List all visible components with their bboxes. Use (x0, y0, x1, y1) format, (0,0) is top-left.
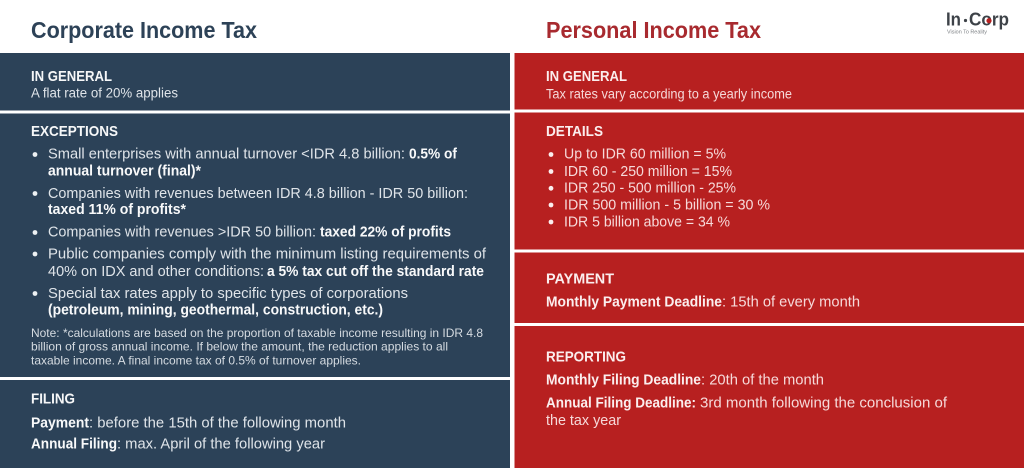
panel: exceptions (0, 114, 510, 377)
panel: payment: : 15th of every month (722, 294, 860, 311)
panel: in general (corporate): IN GENERAL (31, 68, 112, 85)
bullet list: exceptions: Small enterprises with annual turnover <IDR 4.8 billion: (48, 146, 405, 163)
bullet list: tax brackets: Up to IDR 60 million = 5% (564, 146, 726, 163)
panel: in general (personal) (514, 53, 1024, 110)
panel: payment: Monthly Payment Deadline (546, 294, 722, 311)
panel: details (514, 112, 1024, 250)
heading: details: DETAILS (546, 123, 603, 140)
note: calculations: Note: *calculations are based on the proportion of taxable income resulting in IDR 4.8 (31, 326, 483, 340)
panel: filing: : max. April of the following year (117, 436, 325, 453)
panel: reporting: : 20th of the month (701, 372, 824, 389)
logo: InCorp: In (946, 9, 961, 30)
panel: payment: PAYMENT (546, 270, 614, 287)
bullet list: exceptions: Special tax rates apply to specific types of corporations (48, 285, 408, 302)
panel: payment (514, 252, 1024, 323)
bullet list: tax brackets: IDR 5 billion above = 34 % (564, 213, 730, 230)
panel: in general (personal): Tax rates vary according to a yearly income (546, 86, 792, 101)
note: calculations: billion of gross annual income. If below the amount, the reduction applies to all (31, 340, 448, 354)
bullet list: tax brackets: IDR 60 - 250 million = 15% (564, 163, 732, 180)
panel: reporting: Annual Filing Deadline: (546, 394, 696, 411)
bullet list: exceptions: Companies with revenues between IDR 4.8 billion - IDR 50 billion: (48, 185, 468, 202)
panel: filing (0, 380, 510, 468)
panel: reporting: the tax year (546, 412, 621, 429)
logo: InCorp (946, 9, 1009, 36)
note: calculations (31, 326, 483, 368)
bullet list: exceptions: taxed 11% of profits* (48, 201, 186, 218)
panel: in general (personal): IN GENERAL (546, 68, 627, 85)
bullet list: tax brackets: IDR 250 - 500 million - 25% (564, 180, 736, 197)
panel: filing: Annual Filing (31, 436, 117, 453)
bullet list: exceptions: 40% on IDX and other conditions: (48, 263, 264, 280)
title: corporate income tax: Corporate Income Tax (31, 17, 257, 43)
column: personal income tax (514, 17, 1024, 468)
panel: reporting (514, 326, 1024, 468)
logo: InCorp: Corp (969, 9, 1009, 30)
heading: exceptions: EXCEPTIONS (31, 123, 118, 140)
bullet list: exceptions: (petroleum, mining, geothermal, construction, etc.) (48, 302, 383, 319)
panel: in general (corporate): A flat rate of 20% applies (31, 86, 178, 100)
bullet list: exceptions: 0.5% of (409, 146, 458, 163)
panel: reporting: Monthly Filing Deadline (546, 372, 701, 389)
title: personal income tax: Personal Income Tax (546, 17, 761, 43)
bullet list: exceptions: a 5% tax cut off the standard rate (267, 263, 484, 280)
bullet list: exceptions: Companies with revenues >IDR 50 billion: (48, 224, 316, 241)
bullet list: exceptions: Public companies comply with the minimum listing requirements of (48, 246, 487, 263)
column: corporate income tax (0, 17, 510, 468)
panel: filing: Payment (31, 414, 89, 431)
bullet list: exceptions: annual turnover (final)* (48, 163, 201, 180)
bullet list: exceptions (33, 146, 487, 319)
panel: reporting: REPORTING (546, 349, 626, 366)
bullet list: tax brackets: IDR 500 million - 5 billion = 30 % (564, 196, 770, 213)
note: calculations: taxable income. A final income tax of 0.5% of turnover applies. (31, 354, 361, 368)
panel: filing: FILING (31, 391, 75, 408)
panel: reporting: 3rd month following the conclusion of (700, 394, 948, 411)
bullet list: tax brackets (549, 146, 770, 230)
logo: InCorp: Vision To Reality (947, 30, 988, 36)
bullet list: exceptions: taxed 22% of profits (320, 224, 451, 241)
panel: filing: : before the 15th of the following month (89, 414, 346, 431)
panel: in general (corporate) (0, 53, 510, 110)
